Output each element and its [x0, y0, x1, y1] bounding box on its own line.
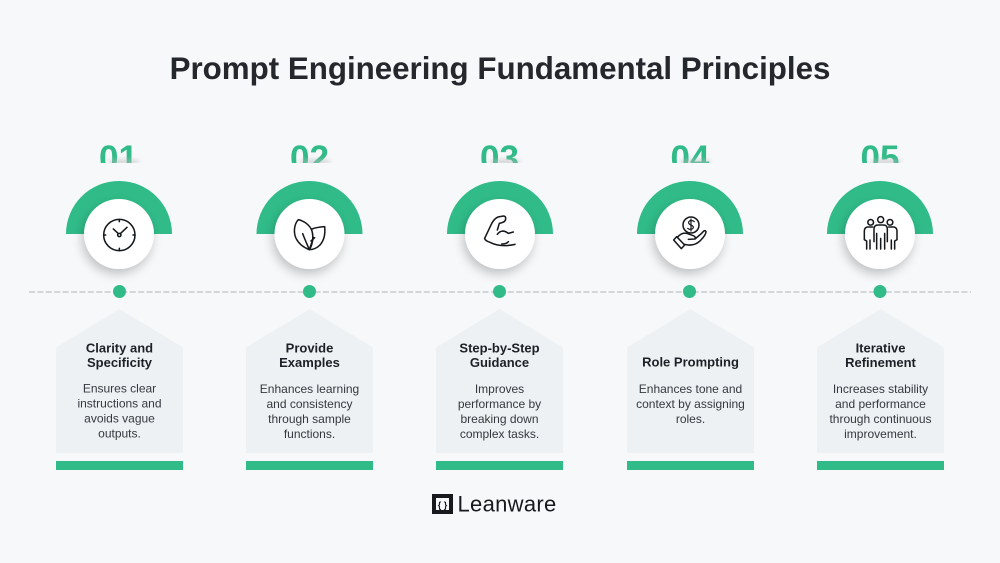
heading: Provide [286, 340, 333, 356]
description: complex tasks. [460, 427, 539, 441]
number 01: 01 [99, 139, 138, 178]
description: performance by [458, 397, 541, 411]
white icon circle [655, 199, 725, 269]
number 05 [862, 145, 902, 163]
green semicircle arc [447, 181, 553, 234]
title: Prompt Engineering Fundamental Principles [170, 51, 830, 86]
description: and performance [835, 397, 926, 411]
timeline dot [303, 285, 316, 298]
number 02 [291, 145, 330, 163]
white icon circle [845, 199, 915, 269]
green semicircle arc [66, 181, 172, 234]
panel: Role Prompting [627, 309, 754, 453]
number 02: 02 [290, 139, 329, 178]
logo: Leanware [432, 492, 557, 516]
description: Ensures clear [83, 382, 156, 396]
number 04: 04 [671, 139, 710, 178]
description: avoids vague [84, 412, 155, 426]
heading: Iterative [856, 340, 905, 356]
logo icon: { } [438, 500, 448, 510]
description: Improves [475, 382, 524, 396]
logo wordmark: Leanware [458, 492, 557, 516]
heading: Refinement [845, 355, 917, 370]
green base bar [817, 461, 944, 470]
panel: Iterative Refinement [817, 309, 944, 453]
description: through sample [268, 412, 351, 426]
step 2: Provide Examples [246, 139, 373, 470]
description: Enhances tone and [639, 382, 742, 396]
description: and consistency [266, 397, 353, 411]
description: context by assigning [636, 397, 745, 411]
timeline dot [493, 285, 506, 298]
heading: Examples [279, 355, 340, 370]
number 05: 05 [861, 139, 899, 178]
icon: leaves [294, 220, 325, 250]
timeline dashed line [29, 291, 971, 293]
description: Enhances learning [260, 382, 359, 396]
number 01 [100, 145, 140, 163]
description: outputs. [98, 426, 141, 440]
white icon circle [465, 199, 535, 269]
step 5: Iterative Refinement [817, 139, 944, 470]
heading: Guidance [470, 355, 529, 370]
green semicircle arc [256, 181, 362, 234]
green base bar [56, 461, 183, 470]
description: functions. [284, 427, 335, 441]
description: through continuous [829, 412, 932, 426]
description: Increases stability [833, 382, 928, 396]
step 3: Step-by-Step Guidance [436, 139, 563, 470]
timeline dot [113, 285, 126, 298]
green semicircle arc [637, 181, 743, 234]
white icon circle [274, 199, 344, 269]
description: roles. [676, 412, 705, 426]
timeline dot [683, 285, 696, 298]
number 04 [672, 145, 710, 163]
green base bar [627, 461, 754, 470]
step 4: Role Prompting [627, 139, 754, 470]
heading: Role Prompting [642, 354, 739, 370]
white icon circle [84, 199, 154, 269]
icon: clock [104, 219, 135, 251]
description: instructions and [77, 396, 162, 410]
number 03 [481, 145, 520, 163]
description: breaking down [460, 412, 539, 426]
panel: Step-by-Step Guidance [436, 309, 563, 453]
green base bar [246, 461, 373, 470]
icon: flexed arm [485, 216, 515, 246]
green semicircle arc [827, 181, 933, 234]
heading: Specificity [87, 355, 153, 370]
heading: Clarity and [86, 340, 153, 356]
panel: Clarity and Specificity [56, 309, 183, 453]
icon: group of people [864, 217, 897, 249]
number 03: 03 [480, 139, 519, 178]
icon: hand holding coin [674, 217, 706, 249]
step 1: Clarity and Specificity [56, 139, 183, 470]
panel: Provide Examples [246, 309, 373, 453]
green base bar [436, 461, 563, 470]
heading: Step-by-Step [459, 340, 540, 356]
description: improvement. [844, 427, 917, 441]
timeline dot [874, 285, 886, 298]
